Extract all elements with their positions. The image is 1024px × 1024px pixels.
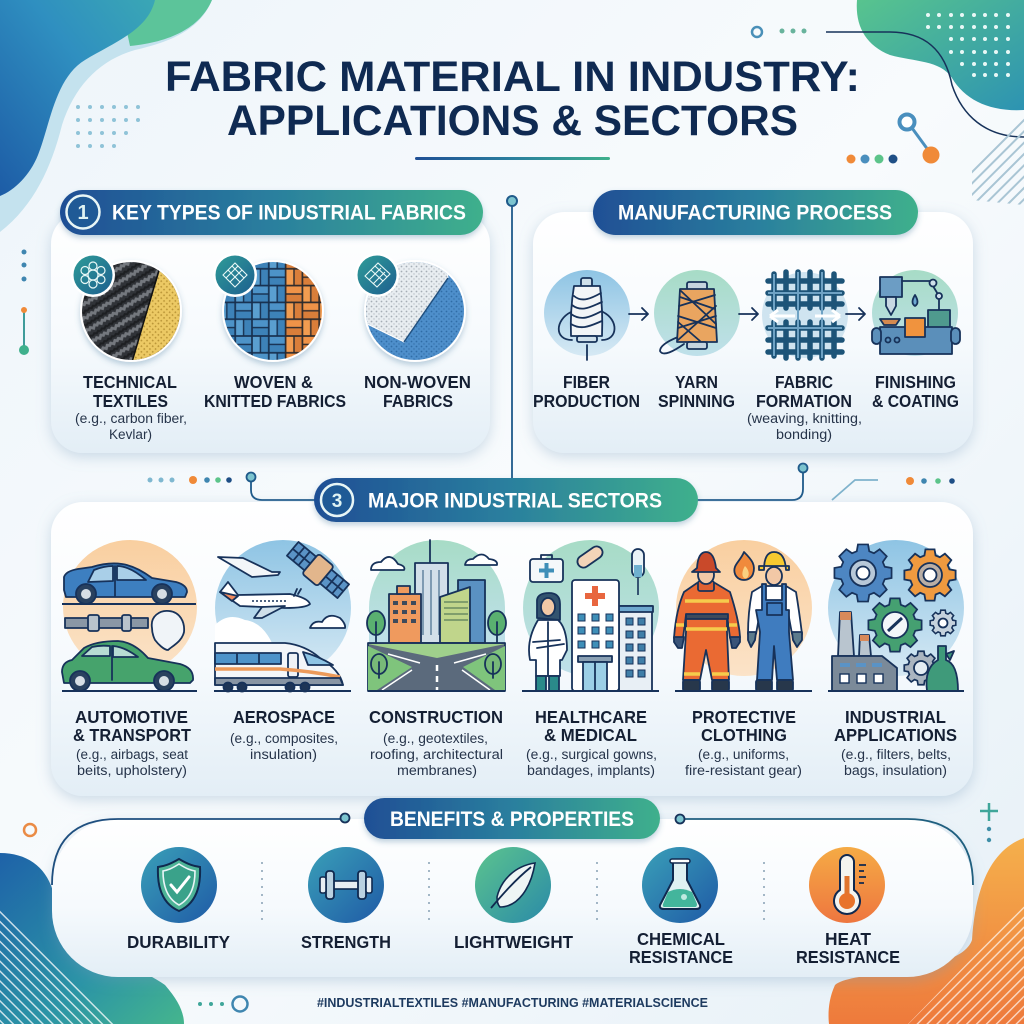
title: APPLICATIONS & SECTORS	[227, 97, 798, 145]
arrow 3	[846, 308, 865, 320]
dotted dividers	[262, 862, 764, 925]
label: fiber production	[533, 372, 640, 411]
label: protective clothing: CLOTHING	[701, 725, 787, 745]
illustration: protective clothing	[674, 540, 812, 691]
label: woven and knitted: KNITTED FABRICS	[204, 391, 346, 411]
label: automotive	[73, 707, 191, 778]
heading pill 2: MANUFACTURING PROCESS	[618, 202, 892, 224]
panel card 4	[52, 819, 973, 977]
illustration: aerospace	[214, 539, 352, 692]
label: construction: CONSTRUCTION	[369, 707, 503, 727]
label: fiber production: FIBER	[563, 372, 610, 392]
label: heat resistance	[796, 929, 900, 967]
label: strength: STRENGTH	[301, 932, 391, 952]
connector: vertical line between panels	[507, 196, 517, 480]
icon: yarn spool	[654, 270, 740, 356]
heading pill 4	[364, 798, 660, 839]
illustration: construction	[367, 540, 506, 691]
label: fabric formation	[747, 372, 862, 442]
label: yarn spinning: YARN	[675, 372, 718, 392]
label: technical textiles: TECHNICAL	[83, 372, 177, 392]
label: protective clothing	[685, 707, 802, 778]
label: fabric formation: (weaving, knitting,	[747, 411, 862, 426]
label: technical textiles: (e.g., carbon fiber,	[75, 411, 187, 426]
label: lightweight: LIGHTWEIGHT	[454, 932, 573, 952]
label: fabric formation: bonding)	[776, 427, 832, 442]
icon: durability shield	[141, 847, 217, 923]
heading pill 3: 3	[332, 491, 342, 512]
icon: chemical flask	[642, 847, 718, 923]
background: left side dots and dot grid	[19, 105, 998, 842]
illustration: automotive and transport	[62, 540, 197, 691]
label: construction: (e.g., geotextiles,	[383, 731, 488, 746]
swatch: woven and knitted fabrics	[213, 253, 325, 362]
label: technical textiles: TEXTILES	[93, 391, 168, 411]
panel: manufacturing process	[533, 190, 973, 453]
title: FABRIC MATERIAL IN INDUSTRY:	[165, 53, 860, 101]
label: construction: roofing, architectural	[370, 747, 503, 762]
label: protective clothing: fire-resistant gear)	[685, 763, 802, 778]
background: top-left blobs	[0, 0, 212, 232]
label: fiber production: PRODUCTION	[533, 391, 640, 411]
label: automotive: beits, upholstery)	[77, 763, 187, 778]
label: industrial applications: INDUSTRIAL	[845, 707, 946, 727]
panel: key types of industrial fabrics	[51, 190, 490, 453]
icon: finishing machine	[872, 270, 960, 356]
label: finishing and coating: FINISHING	[875, 372, 956, 392]
icon: woven fabric lattice	[762, 272, 848, 358]
label: heat resistance: RESISTANCE	[796, 947, 900, 967]
label: yarn spinning: SPINNING	[658, 391, 735, 411]
heading pill 2	[593, 190, 918, 235]
heading pill 1: KEY TYPES OF INDUSTRIAL FABRICS	[112, 202, 466, 224]
label: technical textiles	[75, 372, 187, 442]
panel top outline	[52, 814, 973, 885]
hashtags: #INDUSTRIALTEXTILES #MANUFACTURING #MATERIALSCIENCE	[317, 995, 708, 1010]
label: aerospace	[230, 707, 338, 762]
label: industrial applications: bags, insulation)	[844, 763, 947, 778]
label: fabric formation: FORMATION	[756, 391, 852, 411]
heading pill 3: MAJOR INDUSTRIAL SECTORS	[368, 490, 662, 512]
panel card 2	[533, 212, 973, 453]
label: protective clothing: PROTECTIVE	[692, 707, 796, 727]
background: bottom-right blob	[829, 838, 1024, 1024]
label: aerospace: (e.g., composites,	[230, 731, 338, 746]
label: woven and knitted	[204, 372, 346, 411]
background: top-right blob and decorations	[752, 0, 1024, 205]
label: chemical resistance	[629, 929, 733, 967]
label: technical textiles: Kevlar)	[109, 427, 152, 442]
panel: major industrial sectors	[51, 478, 973, 796]
label: healthcare	[526, 707, 657, 778]
label: chemical resistance: CHEMICAL	[637, 929, 725, 949]
label: healthcare: HEALTHCARE	[535, 707, 647, 727]
icon: lightweight feather	[475, 847, 551, 923]
label: finishing and coating	[872, 372, 959, 411]
illustration: healthcare and medical	[522, 540, 659, 691]
label: automotive: & TRANSPORT	[73, 725, 191, 745]
label: healthcare: (e.g., surgical gowns,	[526, 747, 657, 762]
swatch: non-woven fabrics	[355, 253, 466, 362]
label: woven and knitted: WOVEN &	[234, 372, 313, 392]
label: healthcare: & MEDICAL	[544, 725, 637, 745]
title	[165, 53, 860, 145]
label: aerospace: AEROSPACE	[233, 707, 335, 727]
label: finishing and coating: & COATING	[872, 391, 959, 411]
icon: fiber spool	[544, 270, 630, 360]
arrow 2	[739, 308, 758, 320]
label: automotive: (e.g., airbags, seat	[76, 747, 188, 762]
panel card 1	[51, 212, 490, 453]
illustration: industrial applications	[828, 540, 964, 691]
label: non-woven: FABRICS	[383, 391, 453, 411]
label: healthcare: bandages, implants)	[527, 763, 655, 778]
label: non-woven: NON-WOVEN	[364, 372, 471, 392]
title underline	[415, 157, 610, 160]
icon: strength dumbbell	[308, 847, 384, 923]
label: chemical resistance: RESISTANCE	[629, 947, 733, 967]
label: industrial applications: APPLICATIONS	[834, 725, 957, 745]
swatch: technical textiles	[71, 253, 182, 362]
heading pill 3	[314, 478, 698, 522]
label: durability: DURABILITY	[127, 932, 230, 952]
label: industrial applications: (e.g., filters, belts,	[841, 747, 951, 762]
icon: heat thermometer	[809, 847, 885, 923]
label: construction: membranes)	[397, 763, 477, 778]
label: fabric formation: FABRIC	[775, 372, 833, 392]
connector: left and right to sectors pill	[246, 464, 878, 500]
background: bottom-left blob	[0, 853, 248, 1024]
label: construction	[369, 707, 503, 778]
heading pill 4: BENEFITS & PROPERTIES	[390, 808, 634, 831]
heading pill 1	[60, 190, 483, 235]
label: aerospace: insulation)	[250, 747, 317, 762]
arrow 1	[629, 308, 648, 320]
label: non-woven	[364, 372, 471, 411]
label: heat resistance: HEAT	[825, 929, 871, 949]
panel: benefits and properties	[52, 798, 973, 977]
label: protective clothing: (e.g., uniforms,	[698, 747, 789, 762]
label: automotive: AUTOMOTIVE	[75, 707, 188, 727]
label: industrial applications	[834, 707, 957, 778]
label: yarn spinning	[658, 372, 735, 411]
small dots around sectors pill	[148, 476, 955, 485]
panel card 3	[51, 502, 973, 796]
heading pill 1: 1	[77, 202, 89, 224]
